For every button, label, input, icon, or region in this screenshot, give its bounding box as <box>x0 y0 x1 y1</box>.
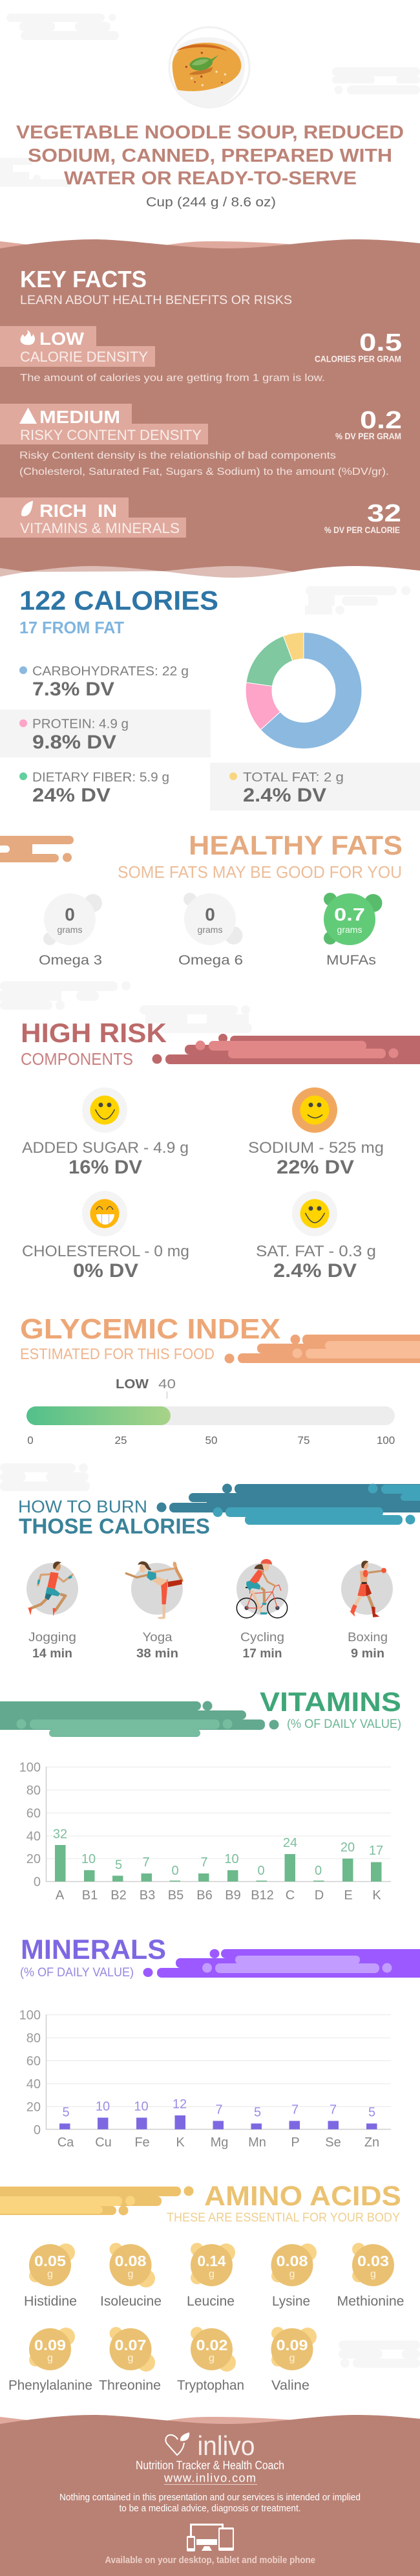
fact: medium risky content density: MEDIUM <box>39 407 120 427</box>
chart: vitamins bars: 20 <box>341 1840 355 1855</box>
chart: minerals bars: Se <box>325 2135 341 2150</box>
fact: low calorie density: LOW <box>39 329 85 349</box>
chart: vitamins bars: D <box>315 1888 324 1903</box>
icon: soup bowl <box>169 27 249 107</box>
heading: amino acids: AMINO ACIDS <box>204 2181 401 2212</box>
heading: calories: 122 CALORIES <box>19 585 218 616</box>
fact: low calorie density <box>0 326 402 384</box>
chart: minerals bars: 5 <box>368 2105 375 2119</box>
fat: omega 3 <box>39 893 102 968</box>
title <box>16 122 404 189</box>
fact: rich in vitamins and minerals: VITAMINS & MINERALS <box>20 520 180 536</box>
fact: rich in vitamins and minerals: RICH IN <box>39 501 117 521</box>
amino acid circles row 2: 0.02 <box>196 2337 227 2353</box>
fact: rich in vitamins and minerals: 32 <box>367 500 401 527</box>
title: VEGETABLE NOODLE SOUP, REDUCED <box>16 122 404 143</box>
chart: minerals bars: 40 <box>26 2077 41 2091</box>
row: protein <box>0 710 211 758</box>
amino acid circles row 1: Lysine <box>272 2294 310 2309</box>
fact: rich in vitamins and minerals <box>0 497 401 538</box>
chart: glycemic bar <box>26 1377 395 1446</box>
chart: glycemic bar: 50 <box>205 1434 217 1446</box>
labels: exercise durations: Boxing <box>348 1631 388 1644</box>
chart: minerals bars: Fe <box>134 2135 150 2150</box>
labels: exercise durations: 14 min <box>32 1647 72 1661</box>
risk: sodium <box>248 1087 384 1178</box>
chart: glycemic bar: LOW <box>116 1377 149 1392</box>
amino acid circles row 1: 0.03 <box>357 2253 389 2269</box>
fat: mufas <box>324 893 383 968</box>
amino acid circles row 1: 0.05 <box>34 2253 66 2269</box>
decoration: amino acids streak <box>0 2187 194 2215</box>
decoration: minerals streak <box>143 1949 420 1978</box>
chart: vitamins bars: 100 <box>19 1761 41 1775</box>
amino acid circles row 1: Histidine <box>24 2294 77 2309</box>
risk: saturated fat: SAT. FAT - 0.3 g <box>256 1243 376 1260</box>
chart: vitamins bars: 0 <box>171 1864 179 1878</box>
subheading: vitamins: (% OF DAILY VALUE) <box>287 1718 401 1731</box>
amino acid circles row 1: g <box>47 2269 53 2280</box>
chart: minerals bars: 7 <box>215 2102 223 2117</box>
subheading: glycemic: ESTIMATED FOR THIS FOOD <box>20 1346 215 1363</box>
chart: minerals bars: 5 <box>254 2105 261 2119</box>
fact: medium risky content density: 0.2 <box>360 407 402 434</box>
fact: medium risky content density: % DV PER GRAM <box>335 431 401 441</box>
risk: cholesterol: CHOLESTEROL - 0 mg <box>22 1243 189 1260</box>
disclaimer <box>59 2493 361 2514</box>
fat: omega 3: 0 <box>65 904 75 924</box>
chart: vitamins bars: E <box>344 1888 353 1903</box>
amino acid circles row 1: g <box>209 2269 215 2280</box>
chart: vitamins bars: K <box>372 1888 381 1903</box>
row: protein: 9.8% DV <box>32 732 116 753</box>
risk: cholesterol: 0% DV <box>73 1260 138 1282</box>
chart: glycemic bar: 40 <box>158 1377 176 1392</box>
row: dietary fiber: DIETARY FIBER: 5.9 g <box>32 770 169 785</box>
fat: mufas: grams <box>337 924 362 935</box>
heading: high risk: HIGH RISK <box>21 1018 167 1048</box>
subheading: from fat: 17 FROM FAT <box>19 618 124 637</box>
fact: medium risky content density: (Cholesterol, Saturated Fat, Sugars & Sodium) to the amount (%DV/gr). <box>19 466 389 477</box>
risk: added sugar <box>22 1087 189 1178</box>
icon: warning triangle <box>19 408 37 424</box>
chart: vitamins bars: 32 <box>53 1827 67 1841</box>
chart: vitamins bars: C <box>286 1888 295 1903</box>
decoration: vitamins streak <box>0 1701 279 1737</box>
heading: how to burn <box>18 1497 210 1538</box>
chart: minerals bars: Cu <box>95 2135 112 2150</box>
chart: minerals bars: 100 <box>19 2008 41 2022</box>
chart: vitamins bars: 0 <box>315 1864 322 1878</box>
fact: low calorie density: The amount of calories you are getting from 1 gram is low. <box>20 373 325 384</box>
chart: minerals bars: Ca <box>58 2135 74 2150</box>
subheading: components: COMPONENTS <box>21 1049 133 1069</box>
chart: glycemic bar: 0 <box>27 1434 34 1446</box>
fat: omega 6: 0 <box>205 904 215 924</box>
chart: vitamins bars: B1 <box>82 1888 98 1903</box>
amino acid circles row 2: 0.09 <box>34 2337 66 2353</box>
fat: omega 3: Omega 3 <box>39 953 102 968</box>
chart: minerals bars: 12 <box>173 2097 187 2112</box>
heading: how to burn: THOSE CALORIES <box>19 1514 210 1538</box>
heading: vitamins: VITAMINS <box>260 1686 401 1717</box>
chart: vitamins bars: 0 <box>257 1864 265 1878</box>
fact: low calorie density: CALORIES PER GRAM <box>315 353 401 364</box>
chart: minerals bars: Zn <box>364 2135 379 2150</box>
fact: rich in vitamins and minerals: % DV PER CALORIE <box>324 525 400 535</box>
fact: low calorie density: CALORIE DENSITY <box>20 349 148 365</box>
chart: minerals bars <box>19 2008 391 2150</box>
row: total fat: 2.4% DV <box>243 785 326 806</box>
title: SODIUM, CANNED, PREPARED WITH <box>28 146 392 166</box>
logo: inlivo heart <box>165 2432 189 2455</box>
amino acid circles row 1: 0.08 <box>277 2253 308 2269</box>
fat: omega 3: grams <box>58 924 82 935</box>
availability note: Available on your desktop, tablet and mobile phone <box>105 2555 315 2566</box>
fat: mufas: 0.7 <box>334 904 365 924</box>
chart: vitamins bars: 24 <box>283 1836 297 1850</box>
chart: vitamins bars: 60 <box>26 1806 41 1820</box>
chart: vitamins bars: B5 <box>168 1888 184 1903</box>
subheading: minerals: (% OF DAILY VALUE) <box>20 1966 134 1980</box>
subheading: amino acids: THESE ARE ESSENTIAL FOR YOUR BODY <box>167 2211 400 2225</box>
chart: vitamins bars: B9 <box>225 1888 241 1903</box>
chart: glycemic bar: 100 <box>377 1434 395 1446</box>
subheading: healthy fats: SOME FATS MAY BE GOOD FOR YOU <box>118 862 402 882</box>
labels: exercise durations: Yoga <box>142 1631 173 1644</box>
panel: footer <box>0 2415 420 2576</box>
chart: vitamins bars <box>19 1761 391 1903</box>
fat: omega 6: grams <box>198 924 222 935</box>
icon: flame <box>21 330 35 345</box>
row: carbohydrates: CARBOHYDRATES: 22 g <box>32 664 189 679</box>
website: www.inlivo.com <box>163 2471 256 2484</box>
risk: added sugar: 16% DV <box>68 1157 142 1178</box>
amino acid circles row 2: 0.07 <box>115 2337 146 2353</box>
risk: saturated fat: 2.4% DV <box>273 1260 357 1282</box>
decoration: high risk streak <box>152 1034 420 1064</box>
chart: vitamins bars: 80 <box>26 1784 41 1798</box>
chart: vitamins bars: 7 <box>142 1855 150 1870</box>
chart: minerals bars: Mg <box>211 2135 228 2150</box>
chart: minerals bars: 5 <box>62 2105 70 2119</box>
icon: devices <box>187 2524 234 2551</box>
chart: minerals bars: Mn <box>248 2135 266 2150</box>
row: total fat <box>210 763 420 811</box>
fact: low calorie density: 0.5 <box>359 329 402 356</box>
amino acid circles row 2: 0.09 <box>277 2337 308 2353</box>
logo text: inlivo <box>198 2430 255 2461</box>
amino acid circles row 2: Valine <box>271 2378 310 2393</box>
amino acid circles row 1 <box>24 2243 404 2309</box>
fact: medium risky content density: Risky Content density is the relationship of bad components <box>19 450 336 461</box>
disclaimer: Nothing contained in this presentation and our services is intended or implied <box>59 2493 361 2503</box>
amino acid circles row 1: Methionine <box>337 2294 404 2309</box>
icons: jogging and yoga figures <box>26 1561 183 1619</box>
labels: exercise durations: 17 min <box>243 1647 282 1661</box>
fat: mufas: MUFAs <box>326 953 376 968</box>
disclaimer: to be a medical advice, diagnosis or treatment. <box>119 2504 301 2514</box>
chart: macronutrient donut <box>246 632 362 749</box>
row: carbohydrates <box>19 664 189 700</box>
heading: healthy fats: HEALTHY FATS <box>189 830 403 860</box>
chart: minerals bars: 7 <box>330 2102 337 2117</box>
amino acid circles row 1: g <box>370 2269 376 2280</box>
serving size: Cup (244 g / 8.6 oz) <box>146 195 276 210</box>
chart: vitamins bars: B2 <box>110 1888 127 1903</box>
heading: how to burn: HOW TO BURN <box>18 1497 147 1516</box>
heading: minerals: MINERALS <box>21 1934 166 1965</box>
subheading: LEARN ABOUT HEALTH BENEFITS OR RISKS <box>20 294 292 307</box>
chart: vitamins bars: B12 <box>251 1888 274 1903</box>
amino acid circles row 2 <box>8 2327 317 2393</box>
chart: glycemic bar: 75 <box>298 1434 310 1446</box>
amino acid circles row 2: Tryptophan <box>177 2378 244 2393</box>
amino acid circles row 1: 0.08 <box>115 2253 147 2269</box>
chart: vitamins bars: 10 <box>224 1852 239 1866</box>
chart: vitamins bars: B6 <box>196 1888 213 1903</box>
chart: vitamins bars: 0 <box>34 1875 41 1889</box>
icons: cycling and boxing figures <box>236 1559 393 1618</box>
amino acid circles row 2: g <box>289 2353 295 2364</box>
chart: vitamins bars: 17 <box>369 1844 383 1858</box>
chart: glycemic bar: 25 <box>115 1434 127 1446</box>
panel: key facts <box>0 239 420 578</box>
fat: omega 6 <box>178 893 243 968</box>
row: carbohydrates: 7.3% DV <box>32 679 114 700</box>
row: dietary fiber <box>19 770 169 806</box>
chart: vitamins bars: B3 <box>140 1888 155 1903</box>
risk: sodium: 22% DV <box>277 1157 354 1178</box>
row: total fat: TOTAL FAT: 2 g <box>243 770 344 785</box>
chart: minerals bars: 60 <box>26 2055 41 2069</box>
amino acid circles row 1: Isoleucine <box>100 2294 162 2309</box>
chart: minerals bars: 0 <box>34 2123 41 2137</box>
chart: minerals bars: 10 <box>96 2100 110 2114</box>
amino acid circles row 2: g <box>128 2353 133 2364</box>
tagline: Nutrition Tracker & Health Coach <box>136 2459 284 2472</box>
chart: vitamins bars: 40 <box>26 1829 41 1844</box>
amino acid circles row 1: Leucine <box>187 2294 235 2309</box>
row: dietary fiber: 24% DV <box>32 785 110 806</box>
amino acid circles row 2: Phenylalanine <box>8 2378 92 2393</box>
risk: added sugar: ADDED SUGAR - 4.9 g <box>22 1139 189 1157</box>
decoration: burn streak <box>156 1484 420 1525</box>
chart: minerals bars: P <box>291 2135 300 2150</box>
chart: minerals bars: 20 <box>26 2100 41 2114</box>
labels: exercise durations <box>28 1631 388 1661</box>
risk: saturated fat <box>256 1191 376 1282</box>
amino acid circles row 1: g <box>128 2269 133 2280</box>
heading: glycemic index: GLYCEMIC INDEX <box>20 1313 280 1345</box>
labels: exercise durations: 9 min <box>351 1647 384 1661</box>
chart: vitamins bars: 20 <box>26 1852 41 1866</box>
risk: cholesterol <box>22 1191 189 1282</box>
title: WATER OR READY-TO-SERVE <box>64 168 357 189</box>
chart: vitamins bars: 10 <box>81 1852 96 1866</box>
amino acid circles row 2: g <box>47 2353 53 2364</box>
decoration: glycemic streak <box>225 1335 420 1364</box>
chart: vitamins bars: 5 <box>115 1858 122 1872</box>
chart: minerals bars: 10 <box>134 2100 149 2114</box>
heading: key facts: KEY FACTS <box>20 266 147 292</box>
amino acid circles row 1: 0.14 <box>198 2253 226 2269</box>
icon: leaf <box>21 501 33 516</box>
fact: medium risky content density <box>0 404 402 477</box>
labels: exercise durations: Cycling <box>240 1631 284 1644</box>
chart: vitamins bars: 7 <box>200 1855 208 1870</box>
chart: minerals bars: 7 <box>291 2102 299 2117</box>
labels: exercise durations: Jogging <box>28 1631 76 1644</box>
labels: exercise durations: 38 min <box>136 1647 178 1661</box>
fact: medium risky content density: RISKY CONTENT DENSITY <box>20 427 202 443</box>
chart: minerals bars: 80 <box>26 2031 41 2046</box>
amino acid circles row 2: Threonine <box>99 2378 161 2393</box>
amino acid circles row 2: g <box>209 2353 215 2364</box>
chart: vitamins bars: A <box>56 1888 65 1903</box>
row: protein: PROTEIN: 4.9 g <box>32 717 129 731</box>
amino acid circles row 1: g <box>289 2269 295 2280</box>
risk: sodium: SODIUM - 525 mg <box>248 1139 384 1157</box>
fat: omega 6: Omega 6 <box>178 953 243 968</box>
decoration: healthy fats streak <box>0 836 74 862</box>
chart: minerals bars: K <box>176 2135 185 2150</box>
